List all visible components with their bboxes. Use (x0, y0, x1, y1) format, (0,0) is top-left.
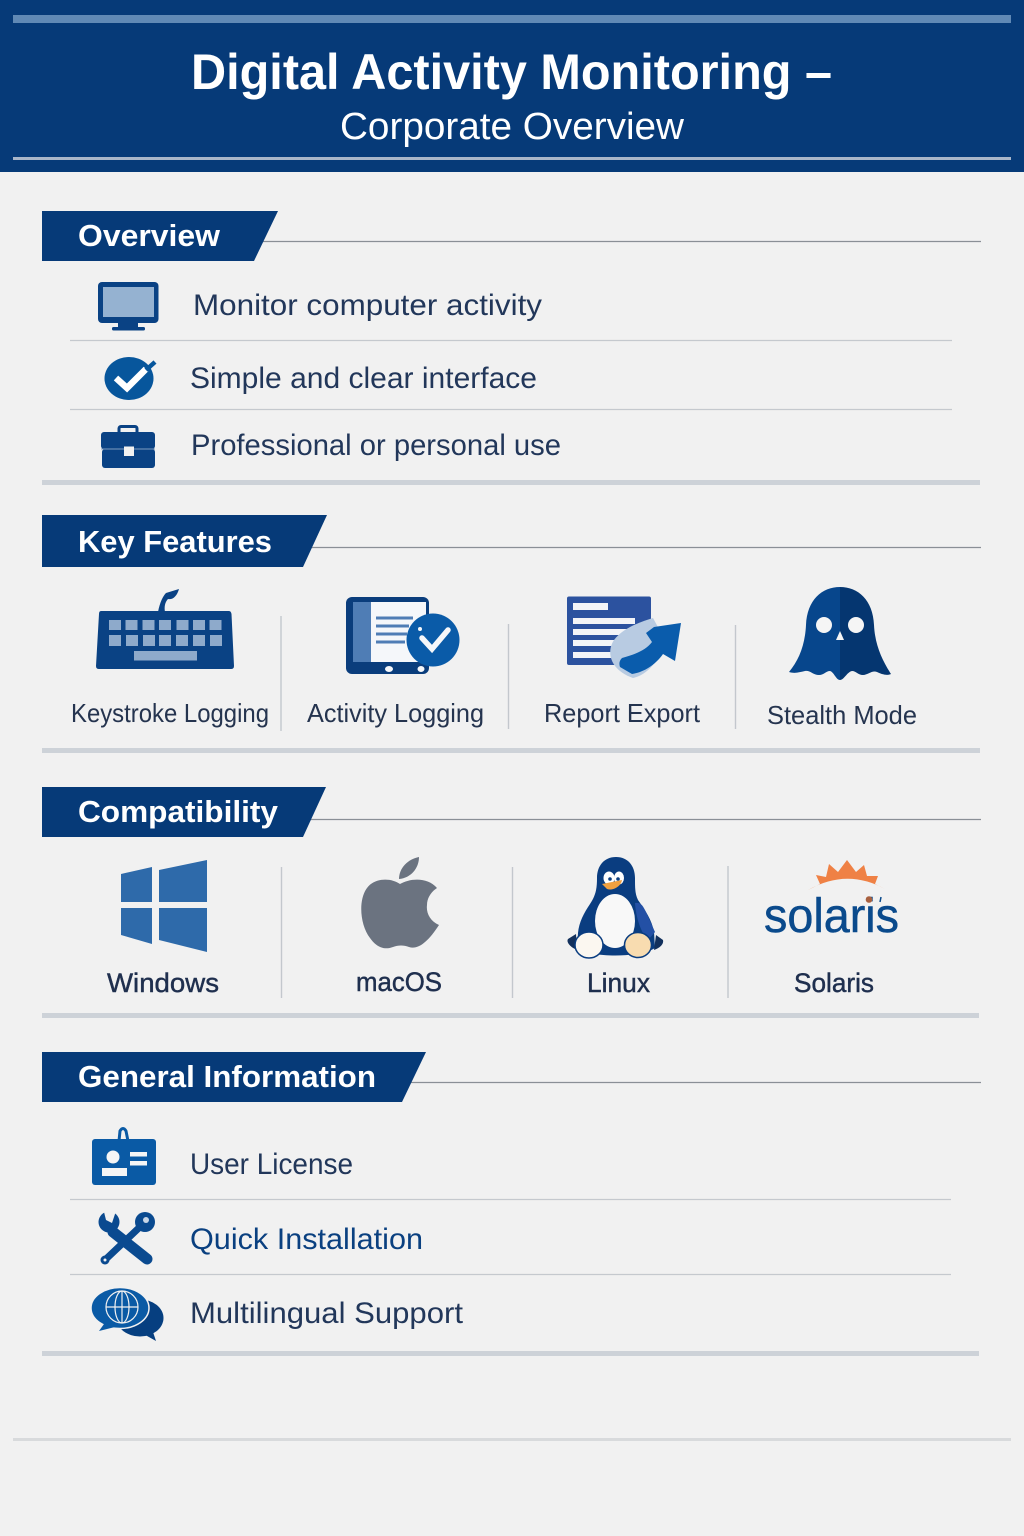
icon: activity log tablet (346, 597, 460, 674)
title: Digital Activity Monitoring – (191, 44, 832, 100)
panel: compatibility (42, 787, 981, 1018)
heading: general information (42, 1052, 981, 1102)
icon: solaris logo (764, 860, 899, 943)
label: windows: Windows (107, 968, 219, 998)
heading: overview (42, 211, 981, 261)
text: user license: User License (190, 1148, 353, 1181)
text: monitor computer activity: Monitor computer activity (193, 289, 542, 322)
icon: globe speech bubbles (91, 1288, 164, 1341)
subtitle: Corporate Overview (340, 106, 685, 148)
label: report export: Report Export (544, 698, 701, 728)
label: activity logging: Activity Logging (307, 698, 484, 728)
icon: monitor (98, 282, 158, 330)
icon: stealth ghost (789, 587, 891, 680)
icon: solaris logo: solaris (764, 890, 899, 943)
icon: keyboard (96, 589, 234, 669)
heading: overview: Overview (78, 218, 221, 253)
heading: compatibility: Compatibility (78, 794, 279, 829)
heading: key features: Key Features (78, 524, 272, 559)
header banner (0, 0, 1024, 172)
text: professional or personal use: Professional or personal use (191, 429, 561, 462)
label: solaris: Solaris (794, 968, 874, 998)
icon: report export (567, 596, 681, 678)
heading: key features (42, 515, 981, 567)
icon: check badge (104, 357, 155, 400)
panel: general information (42, 1052, 981, 1356)
icon: briefcase (101, 426, 155, 468)
icon: tools (98, 1208, 155, 1264)
icon: windows logo (121, 860, 207, 952)
label: linux: Linux (587, 968, 650, 998)
icon: id badge (92, 1128, 156, 1185)
text: multilingual support: Multilingual Support (190, 1297, 464, 1330)
panel: key features (42, 515, 981, 753)
icon: apple logo (361, 857, 439, 948)
panel: overview (42, 211, 981, 485)
label: stealth mode: Stealth Mode (767, 700, 917, 730)
text: simple and clear interface: Simple and clear interface (190, 362, 537, 395)
label: keystroke logging: Keystroke Logging (71, 698, 269, 728)
heading: compatibility (42, 787, 981, 837)
heading: general information: General Information (78, 1059, 376, 1094)
icon: linux penguin (567, 857, 663, 958)
text: quick installation: Quick Installation (190, 1223, 423, 1256)
label: macos: macOS (356, 967, 442, 997)
